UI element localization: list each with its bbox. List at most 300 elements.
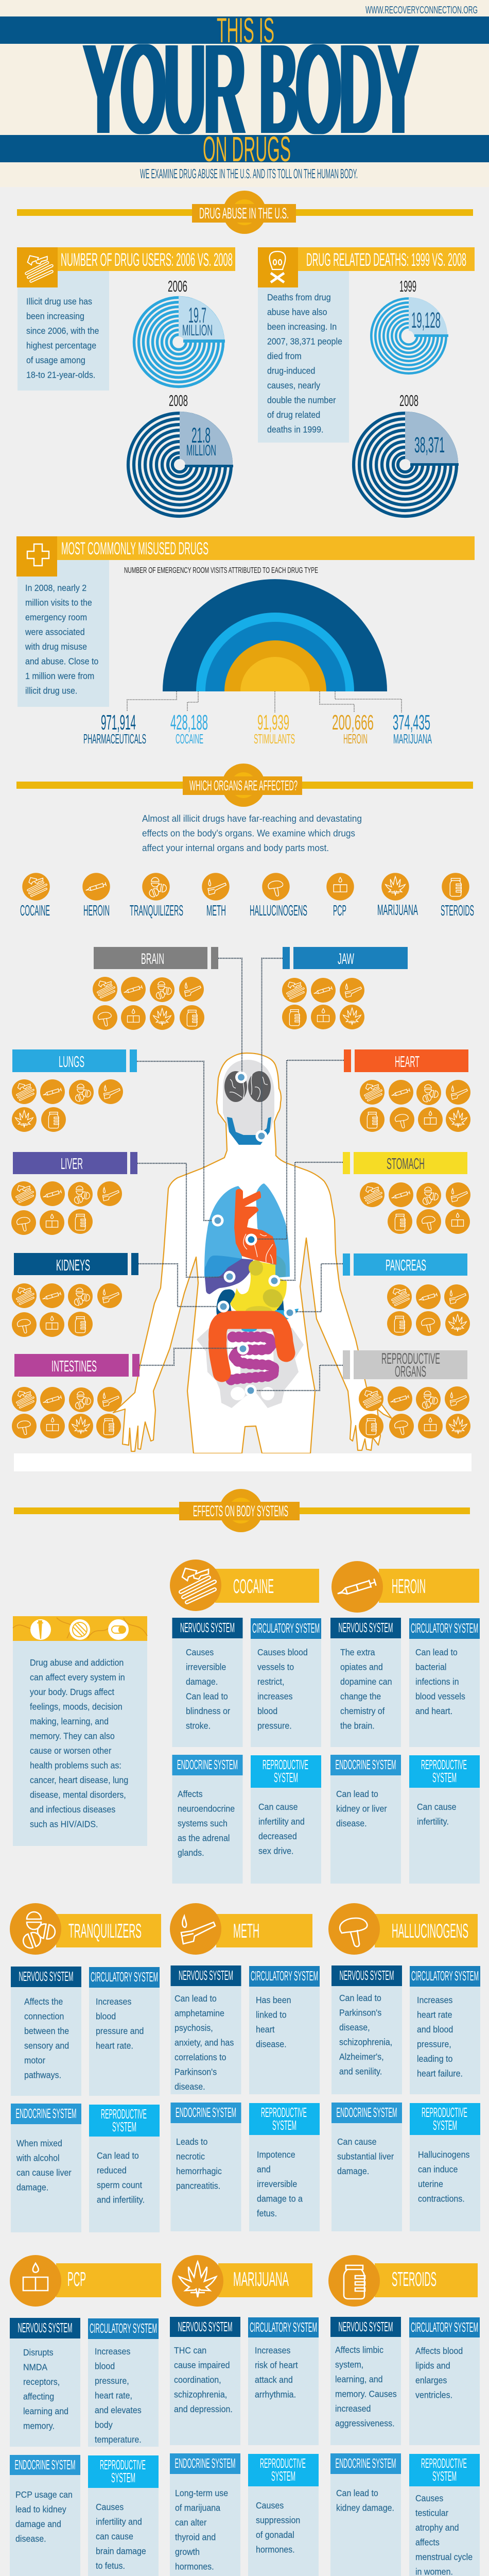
- cocaine: circulatory system: increases: [257, 1691, 292, 1702]
- text block: making, learning, and: [30, 1716, 109, 1726]
- meth: nervous system: amphetamine: [174, 2008, 224, 2019]
- heroin: endocrine system: disease.: [336, 1818, 367, 1828]
- tranquilizers: nervous system: NERVOUS SYSTEM: [19, 1969, 73, 1984]
- text: ENDOCRINE SYSTEM: [15, 2106, 76, 2121]
- title band bottom: [0, 129, 489, 169]
- hallucinogens: endocrine system: substantial liver: [337, 2151, 394, 2162]
- cocaine: nervous system: NERVOUS SYSTEM: [180, 1620, 235, 1635]
- text block: of usage among: [26, 355, 85, 365]
- stat: marijuana: MARIJUANA: [393, 731, 432, 747]
- drug heading: cocaine: [170, 1560, 319, 1611]
- marijuana: nervous system: THC can: [174, 2345, 206, 2355]
- cocaine: circulatory system: Causes blood: [257, 1647, 308, 1657]
- pcp: nervous system: memory.: [23, 2421, 55, 2431]
- meth: reproductive system: irreversible: [257, 2179, 297, 2189]
- title band top: THIS IS: [217, 11, 274, 50]
- icon: tranquilizers: [130, 873, 183, 919]
- pcp: circulatory system: pressure,: [95, 2376, 129, 2386]
- heroin: circulatory system: blood vessels: [415, 1691, 465, 1702]
- icon: cocaine lines: [26, 256, 52, 281]
- text: PHARMACEUTICALS: [83, 731, 146, 747]
- marijuana: circulatory system: attack and: [255, 2375, 293, 2385]
- text block: feelings, moods, decision: [30, 1702, 123, 1712]
- skull: [223, 1060, 274, 1145]
- drug heading: meth: [170, 1903, 312, 1955]
- chart: pie 2006: MILLION: [182, 322, 213, 339]
- tranquilizers: circulatory system: Increases: [96, 1996, 131, 2007]
- meth: circulatory system: heart: [256, 2024, 275, 2035]
- steroids: circulatory system: ventricles.: [415, 2390, 452, 2400]
- chart: pie 2008: MILLION: [186, 442, 216, 459]
- steroids: reproductive system: atrophy and: [415, 2522, 459, 2533]
- marijuana: nervous system: coordination,: [174, 2375, 221, 2385]
- hallucinogens: circulatory system: Increases: [417, 1995, 452, 2005]
- marijuana: endocrine system: Long-term use: [175, 2488, 228, 2498]
- text: ENDOCRINE SYSTEM: [337, 2105, 397, 2120]
- pcp: reproductive system: to fetus.: [96, 2561, 125, 2571]
- panel: most commonly misused drugs: [16, 536, 475, 707]
- meth: reproductive system: and: [257, 2164, 271, 2175]
- pcp: nervous system: NMDA: [23, 2362, 48, 2372]
- marijuana: endocrine system: can alter: [175, 2517, 207, 2528]
- text: 428,188: [170, 710, 208, 734]
- text: ENDOCRINE SYSTEM: [175, 2455, 236, 2471]
- text: CIRCULATORY SYSTEM: [251, 1968, 318, 1984]
- hallucinogens: circulatory system: and blood: [417, 2024, 453, 2035]
- label: 2008: 2008: [399, 392, 418, 410]
- meth: endocrine system: [171, 2103, 241, 2231]
- stat: heroin: 200,666: [332, 710, 374, 734]
- text: ENDOCRINE SYSTEM: [176, 2105, 236, 2120]
- pcp: endocrine system: [10, 2455, 80, 2576]
- tranquilizers: nervous system: motor: [24, 2055, 45, 2065]
- hallucinogens: circulatory system: pressure,: [417, 2039, 451, 2049]
- text block: were associated: [25, 627, 85, 637]
- pcp: reproductive system: REPRODUCTIVE: [100, 2457, 146, 2472]
- hallucinogens: nervous system: Can lead to: [339, 1993, 381, 2003]
- tranquilizers: reproductive system: [89, 2105, 160, 2232]
- pcp: circulatory system: and elevates: [95, 2405, 142, 2415]
- pcp: circulatory system: Increases: [95, 2346, 130, 2357]
- marijuana: reproductive system: Causes: [256, 2500, 284, 2511]
- jaw: [227, 1117, 271, 1145]
- hallucinogens: nervous system: and senility.: [339, 2066, 382, 2077]
- icon: hallucinogens: [250, 873, 307, 919]
- heroin: nervous system: opiates and: [340, 1662, 383, 1672]
- section heading: which organs: WHICH ORGANS ARE AFFECTED?: [189, 777, 298, 793]
- title band bottom: ON DRUGS: [203, 129, 291, 169]
- text block: drug-induced: [267, 366, 315, 376]
- kidneys: [216, 1290, 284, 1317]
- text: 1999: [399, 277, 416, 295]
- cocaine: circulatory system: blood: [257, 1706, 277, 1716]
- tranquilizers: nervous system: [11, 1967, 81, 2096]
- chart title: NUMBER OF EMERGENCY ROOM VISITS ATTRIBUTED TO EACH DRUG TYPE: [124, 566, 318, 575]
- connector lines: [127, 691, 401, 713]
- pcp: circulatory system: temperature.: [95, 2434, 142, 2445]
- hallucinogens: circulatory system: [410, 1966, 480, 2094]
- icon: meth: METH: [206, 903, 226, 919]
- meth: endocrine system: pancreatitis.: [176, 2181, 220, 2191]
- marijuana: nervous system: and depression.: [174, 2404, 233, 2414]
- cocaine: circulatory system: [251, 1618, 321, 1747]
- cocaine: endocrine system: glands.: [178, 1848, 204, 1858]
- organ: jaw: JAW: [338, 951, 354, 968]
- decorative squiggles: [13, 1618, 147, 1638]
- stat: stimulants: 91,939: [257, 710, 289, 734]
- text block: been increasing. In: [267, 321, 337, 332]
- chart: pie 2006: [134, 296, 225, 386]
- steroids: reproductive system: affects: [415, 2537, 440, 2548]
- section heading: effects on body systems: EFFECTS ON BODY SYSTEMS: [193, 1503, 288, 1520]
- icon: cocaine: [20, 873, 50, 919]
- right lung shadow: [275, 1256, 286, 1277]
- marijuana: reproductive system: hormones.: [256, 2545, 295, 2555]
- drug heading: heroin: [331, 1561, 479, 1613]
- text block: cause or worsen other: [30, 1745, 112, 1756]
- meth: reproductive system: damage to a: [257, 2194, 303, 2204]
- text block: Drug abuse and addiction: [30, 1657, 124, 1668]
- text block: Illicit drug use has: [26, 296, 92, 307]
- drug heading: cocaine: COCAINE: [233, 1575, 274, 1598]
- stat: pharmaceuticals: [83, 710, 146, 747]
- cocaine: reproductive system: [251, 1755, 321, 1884]
- tranquilizers: circulatory system: blood: [96, 2011, 116, 2022]
- steroids: endocrine system: [330, 2453, 401, 2576]
- drug heading: tranquilizers: TRANQUILIZERS: [68, 1920, 142, 1942]
- icon: heroin: [82, 873, 110, 919]
- meth: nervous system: NERVOUS SYSTEM: [179, 1968, 233, 1983]
- cocaine: endocrine system: Affects: [178, 1789, 203, 1799]
- organ: brain: [93, 947, 218, 1030]
- liver: [205, 1259, 253, 1294]
- stomach: [230, 1260, 287, 1316]
- pcp: reproductive system: infertility and: [96, 2517, 142, 2527]
- steroids: nervous system: aggressiveness.: [335, 2418, 395, 2429]
- hallucinogens: nervous system: [331, 1965, 402, 2094]
- text: NUMBER OF DRUG USERS: 2006 VS. 2008: [61, 250, 233, 270]
- steroids: nervous system: Affects limbic: [335, 2345, 383, 2355]
- hallucinogens: reproductive system: [410, 2103, 480, 2231]
- pcp: nervous system: affecting: [23, 2392, 54, 2402]
- cocaine: endocrine system: as the adrenal: [178, 1833, 230, 1843]
- text block: died from: [267, 351, 302, 361]
- cocaine: endocrine system: neuroendocrine: [178, 1804, 235, 1814]
- panel: number of drug users: [17, 247, 235, 391]
- marijuana: circulatory system: arrhythmia.: [255, 2389, 296, 2400]
- hallucinogens: reproductive system: contractions.: [418, 2194, 465, 2204]
- text block: illicit drug use.: [25, 686, 77, 696]
- pcp: reproductive system: [88, 2455, 159, 2576]
- meth: endocrine system: hemorrhagic: [176, 2166, 222, 2176]
- heroin: endocrine system: Can lead to: [336, 1789, 378, 1799]
- legend: drug icons: [20, 873, 474, 919]
- steroids: circulatory system: enlarges: [415, 2375, 447, 2385]
- heroin: nervous system: chemistry of: [340, 1706, 385, 1716]
- panel: intro to body systems: [13, 1616, 147, 1846]
- marijuana: nervous system: schizophrenia,: [174, 2389, 227, 2400]
- legend: drug icons: TRANQUILIZERS: [130, 903, 183, 919]
- heroin: circulatory system: bacterial: [415, 1662, 446, 1672]
- drug heading: marijuana: [172, 2255, 312, 2307]
- drug heading: marijuana: MARIJUANA: [233, 2268, 289, 2291]
- icon: pcp: PCP: [333, 903, 346, 919]
- hallucinogens: endocrine system: Can cause: [337, 2137, 376, 2147]
- text block: deaths in 1999.: [267, 425, 323, 435]
- meth: reproductive system: REPRODUCTIVE: [261, 2105, 307, 2120]
- tranquilizers: endocrine system: [11, 2104, 81, 2232]
- chart: pie 2008 deaths: [354, 412, 459, 516]
- panel: most commonly misused drugs: MOST COMMONLY MISUSED DRUGS: [61, 539, 208, 558]
- steroids: reproductive system: menstrual cycle: [415, 2552, 473, 2562]
- text: ENDOCRINE SYSTEM: [336, 1757, 396, 1772]
- liver shadow: [205, 1256, 242, 1277]
- hallucinogens: nervous system: disease,: [339, 2022, 370, 2032]
- text block: In 2008, nearly 2: [25, 583, 86, 593]
- organ: heart: HEART: [395, 1053, 420, 1071]
- marijuana: endocrine system: [170, 2453, 240, 2576]
- tranquilizers: reproductive system: Can lead to: [97, 2150, 139, 2161]
- lungs: [204, 1183, 290, 1278]
- legend: drug icons: HEROIN: [83, 903, 110, 919]
- meth: nervous system: disease.: [174, 2081, 205, 2092]
- pcp: endocrine system: PCP usage can: [15, 2489, 73, 2500]
- chart: pie 2008: 21.8: [191, 423, 211, 447]
- hallucinogens: reproductive system: uterine: [418, 2179, 443, 2189]
- chart: pie 2006: 19.7: [188, 303, 206, 327]
- organ: pancreas: PANCREAS: [386, 1256, 426, 1274]
- legend: drug icons: HALLUCINOGENS: [250, 903, 307, 919]
- steroids: circulatory system: lipids and: [415, 2361, 450, 2371]
- hallucinogens: reproductive system: SYSTEM: [433, 2117, 457, 2133]
- text: ENDOCRINE SYSTEM: [177, 1757, 238, 1772]
- heroin: reproductive system: Can cause: [417, 1802, 456, 1812]
- stat: pharmaceuticals: 971,914: [101, 710, 136, 734]
- organ: kidneys: KIDNEYS: [56, 1256, 90, 1274]
- steroids: nervous system: [330, 2317, 401, 2445]
- hallucinogens: endocrine system: damage.: [337, 2166, 369, 2176]
- marijuana: endocrine system: hormones.: [175, 2562, 214, 2572]
- stat: heroin: [332, 710, 374, 747]
- marijuana: reproductive system: REPRODUCTIVE: [260, 2455, 306, 2471]
- heroin: nervous system: dopamine can: [340, 1676, 392, 1687]
- intro text: [142, 814, 362, 853]
- heroin: nervous system: the brain.: [340, 1721, 375, 1731]
- marijuana: circulatory system: [248, 2317, 319, 2445]
- heroin: circulatory system: and heart.: [415, 1706, 452, 1716]
- marijuana: reproductive system: of gonadal: [256, 2530, 294, 2540]
- hallucinogens: endocrine system: [331, 2103, 402, 2231]
- section heading: which organs: [16, 764, 473, 807]
- meth: reproductive system: [249, 2103, 320, 2231]
- tranquilizers: nervous system: sensory and: [24, 2041, 69, 2051]
- marijuana: endocrine system: growth: [175, 2547, 200, 2557]
- organ markers: [212, 1072, 295, 1396]
- steroids: nervous system: increased: [335, 2403, 371, 2414]
- steroids: nervous system: NERVOUS SYSTEM: [339, 2319, 393, 2334]
- pcp: circulatory system: blood: [95, 2361, 115, 2371]
- pcp: circulatory system: [88, 2318, 159, 2447]
- heroin: nervous system: The extra: [340, 1647, 375, 1657]
- hallucinogens: nervous system: Alzheimer's,: [339, 2052, 384, 2062]
- text block: 1 million were from: [25, 671, 94, 681]
- heroin: nervous system: [330, 1618, 401, 1747]
- hallucinogens: nervous system: schizophrenia,: [339, 2037, 392, 2047]
- cocaine: reproductive system: sex drive.: [258, 1846, 293, 1856]
- marijuana: reproductive system: [248, 2454, 319, 2576]
- background: cream top: [0, 0, 489, 187]
- stat: cocaine: [170, 710, 208, 747]
- organ: intestines: [12, 1354, 139, 1438]
- chart: pie 1999: [371, 297, 448, 374]
- chart: pie 2008 deaths: 38,371: [414, 433, 445, 457]
- tranquilizers: endocrine system: damage.: [16, 2182, 48, 2193]
- text block: double the number: [267, 395, 336, 405]
- hallucinogens: nervous system: Parkinson's: [339, 2008, 381, 2018]
- tranquilizers: reproductive system: REPRODUCTIVE: [101, 2106, 147, 2122]
- heroin: circulatory system: infections in: [415, 1676, 459, 1687]
- heroin: nervous system: change the: [340, 1691, 381, 1702]
- organ: reproductive organs: [343, 1350, 470, 1438]
- tranquilizers: endocrine system: with alcohol: [16, 2153, 60, 2163]
- label: 2008: 2008: [169, 392, 188, 410]
- text: ENDOCRINE SYSTEM: [14, 2457, 75, 2472]
- marijuana: endocrine system: thyroid and: [175, 2532, 216, 2543]
- pcp: circulatory system: heart rate,: [95, 2391, 132, 2401]
- meth: nervous system: Can lead to: [174, 1993, 217, 2004]
- cocaine: circulatory system: restrict,: [257, 1676, 284, 1687]
- organ: stomach: [343, 1152, 470, 1234]
- drug heading: tranquilizers: [10, 1903, 161, 1955]
- text block: and infectious diseases: [30, 1804, 115, 1815]
- brain: [224, 1071, 271, 1102]
- text block: health problems such as:: [30, 1760, 121, 1771]
- cocaine: nervous system: irreversible: [186, 1662, 226, 1672]
- text: CIRCULATORY SYSTEM: [91, 1969, 158, 1985]
- steroids: nervous system: learning, and: [335, 2374, 383, 2384]
- icon: marijuana: [377, 873, 418, 919]
- pcp: nervous system: Disrupts: [23, 2347, 54, 2358]
- text: CIRCULATORY SYSTEM: [250, 2319, 317, 2335]
- cocaine: circulatory system: pressure.: [257, 1721, 292, 1731]
- label: 2006: 2006: [168, 277, 187, 295]
- pcp: reproductive system: brain damage: [96, 2546, 146, 2556]
- steroids: nervous system: memory. Causes: [335, 2389, 397, 2399]
- text block: Deaths from drug: [267, 292, 331, 302]
- heroin: circulatory system: Can lead to: [415, 1647, 458, 1657]
- heroin: nervous system: NERVOUS SYSTEM: [339, 1620, 393, 1635]
- steroids: nervous system: system,: [335, 2360, 363, 2370]
- steroids: circulatory system: [409, 2317, 480, 2445]
- tranquilizers: reproductive system: sperm count: [97, 2180, 142, 2190]
- cocaine: reproductive system: infertility and: [258, 1817, 305, 1827]
- text block: been increasing: [26, 311, 84, 321]
- pcp: reproductive system: Causes: [96, 2502, 124, 2512]
- organ: lungs: LUNGS: [59, 1053, 84, 1071]
- drug heading: steroids: [328, 2255, 478, 2307]
- small intestine: [228, 1337, 274, 1381]
- heroin: reproductive system: infertility.: [417, 1817, 449, 1827]
- cocaine: nervous system: Can lead to: [186, 1691, 228, 1702]
- marijuana: reproductive system: SYSTEM: [271, 2468, 295, 2484]
- text block: cancer, heart disease, lung: [30, 1775, 128, 1785]
- organ: brain: BRAIN: [141, 951, 164, 968]
- tranquilizers: endocrine system: When mixed: [16, 2138, 62, 2148]
- hallucinogens: circulatory system: heart failure.: [417, 2069, 463, 2079]
- hallucinogens: reproductive system: can induce: [418, 2164, 458, 2175]
- cocaine: reproductive system: decreased: [258, 1831, 297, 1841]
- tranquilizers: nervous system: pathways.: [24, 2070, 61, 2080]
- chart: pie 2008: [128, 412, 233, 516]
- pcp: nervous system: [10, 2318, 80, 2447]
- chart: pie 1999: 19,128: [411, 308, 441, 333]
- hallucinogens: reproductive system: Hallucinogens: [418, 2149, 469, 2160]
- heroin: endocrine system: kidney or liver: [336, 1804, 387, 1814]
- meth: circulatory system: [249, 1966, 320, 2094]
- steroids: endocrine system: kidney damage.: [336, 2503, 394, 2513]
- organ: stomach: STOMACH: [387, 1155, 425, 1173]
- cocaine: nervous system: stroke.: [186, 1721, 211, 1731]
- organ: intestines: INTESTINES: [51, 1357, 97, 1375]
- text block: since 2006, with the: [26, 326, 99, 336]
- steroids: reproductive system: testicular: [415, 2508, 448, 2518]
- cocaine: reproductive system: SYSTEM: [274, 1770, 298, 1785]
- stat: stimulants: [254, 710, 295, 747]
- text block: such as HIV/AIDS.: [30, 1819, 98, 1829]
- hallucinogens: circulatory system: heart rate: [417, 2010, 452, 2020]
- text block: of drug related: [267, 410, 320, 420]
- body outline: [113, 1053, 392, 1453]
- organ: lungs: [12, 1049, 137, 1132]
- pcp: reproductive system: can cause: [96, 2531, 133, 2541]
- organ: jaw: [282, 947, 408, 1029]
- heroin: circulatory system: [409, 1618, 480, 1747]
- icons: syringe, pill, capsule: [30, 1619, 129, 1640]
- meth: nervous system: [171, 1965, 241, 2094]
- drug heading: pcp: PCP: [67, 2268, 86, 2291]
- marijuana: nervous system: cause impaired: [174, 2360, 230, 2370]
- icon: pcp: [326, 873, 354, 919]
- text block: with drug misuse: [25, 641, 87, 652]
- heroin: endocrine system: [330, 1755, 401, 1884]
- text: STIMULANTS: [254, 731, 295, 747]
- text block: million visits to the: [25, 598, 92, 608]
- organ: liver: [11, 1152, 137, 1235]
- meth: reproductive system: fetus.: [257, 2208, 277, 2218]
- cocaine: reproductive system: Can cause: [258, 1802, 298, 1812]
- pcp: endocrine system: disease.: [15, 2534, 46, 2544]
- steroids: endocrine system: Can lead to: [336, 2488, 378, 2498]
- section heading: drug abuse: [17, 191, 473, 234]
- marijuana: reproductive system: suppression: [256, 2515, 300, 2526]
- tranquilizers: reproductive system: reduced: [97, 2165, 127, 2176]
- cocaine: endocrine system: [172, 1755, 243, 1884]
- text block: 2007, 38,371 people: [267, 336, 342, 347]
- organ connector lines: [137, 958, 344, 1391]
- cocaine: endocrine system: systems such: [178, 1818, 228, 1828]
- tranquilizers: endocrine system: can cause liver: [16, 2167, 72, 2178]
- text block: emergency room: [25, 612, 87, 622]
- section heading: drug abuse: DRUG ABUSE IN THE U.S.: [199, 205, 289, 222]
- marijuana: nervous system: NERVOUS SYSTEM: [178, 2319, 233, 2334]
- steroids: circulatory system: Affects blood: [415, 2346, 463, 2356]
- meth: nervous system: correlations to: [174, 2052, 226, 2062]
- meth: endocrine system: necrotic: [176, 2151, 205, 2162]
- section heading: effects on body systems: [14, 1489, 470, 1532]
- title band top: [0, 11, 489, 50]
- pelvis: [197, 1328, 304, 1408]
- text block: and abuse. Close to: [25, 656, 98, 667]
